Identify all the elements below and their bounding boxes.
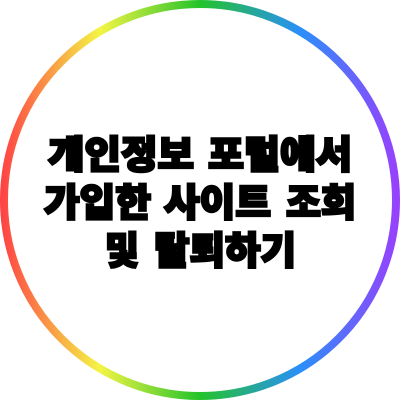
title line 2: 조회 bbox=[286, 183, 356, 225]
title line 1: 개인정보 bbox=[48, 135, 194, 177]
title line 1 bbox=[48, 135, 352, 177]
title line 2: 사이트 bbox=[164, 183, 271, 225]
title line 2 bbox=[44, 183, 356, 225]
title line 3: 탈퇴하기 bbox=[154, 231, 296, 273]
title line 1: 포털에서 bbox=[208, 135, 352, 177]
title line 2: 가입한 bbox=[44, 183, 151, 225]
title line 3: 및 bbox=[105, 231, 139, 273]
title bbox=[44, 135, 356, 273]
